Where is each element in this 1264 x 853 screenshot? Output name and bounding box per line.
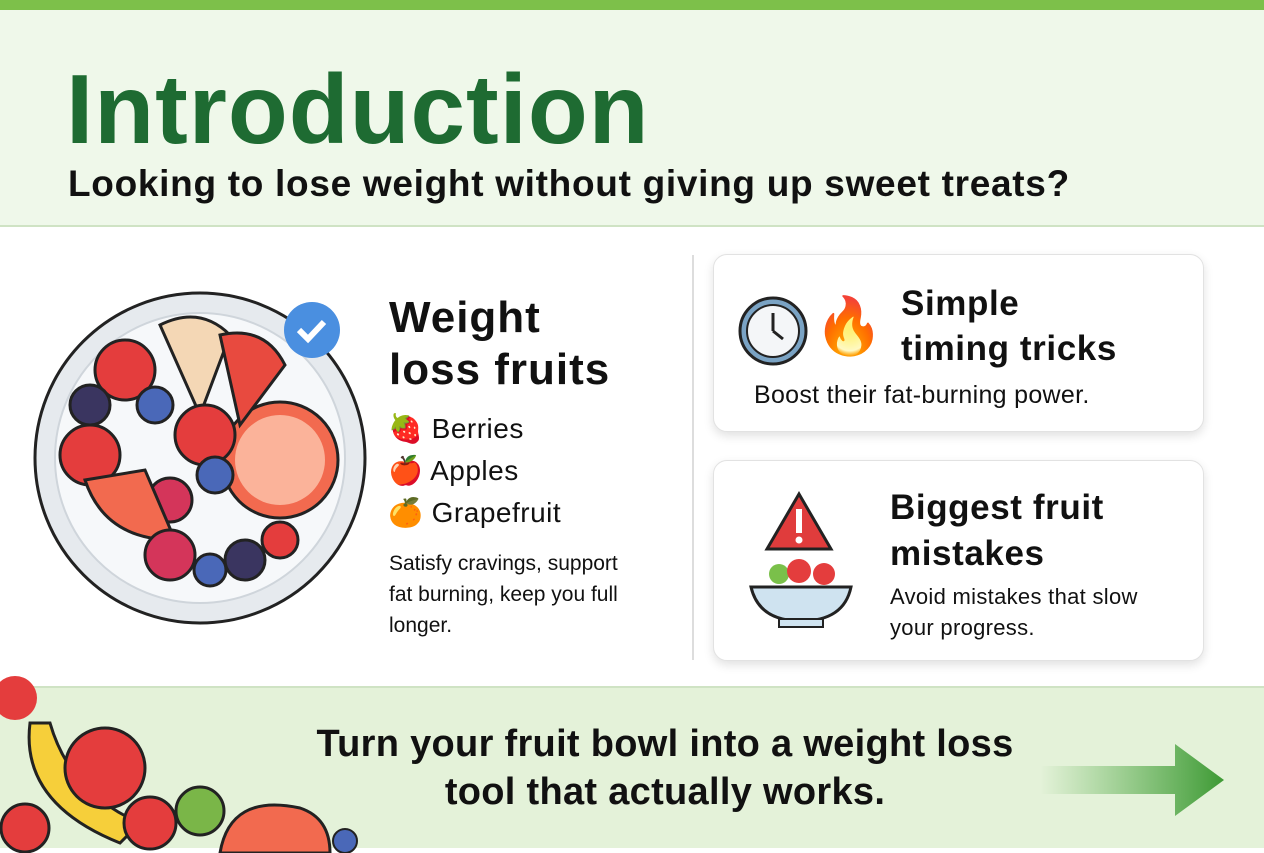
heading: weight loss fruits	[389, 293, 610, 394]
heading	[890, 488, 1104, 573]
heading: weight loss fruits: Weight	[389, 293, 541, 342]
icon: clock	[738, 296, 808, 366]
heading: Biggest fruit	[890, 488, 1104, 527]
card: mistakes	[713, 460, 1204, 661]
heading: mistakes	[890, 534, 1045, 573]
description	[389, 552, 618, 637]
fruit list: 🍓 Berries	[388, 413, 524, 444]
card: timing tricks	[713, 254, 1204, 432]
fruit pile illustration	[0, 676, 358, 853]
subtitle: Looking to lose weight without giving up sweet treats?	[68, 163, 1070, 204]
icon: warning bowl	[749, 491, 853, 628]
closing message	[316, 723, 1014, 813]
arrow	[1050, 744, 1224, 816]
header panel	[0, 10, 1264, 227]
footer band	[0, 686, 1264, 848]
text: Avoid mistakes that slow	[890, 584, 1138, 609]
heading: weight loss fruits: loss fruits	[389, 345, 610, 394]
fruit list: 🍊 Grapefruit	[388, 497, 561, 528]
fruit bowl illustration	[34, 292, 366, 624]
description: Satisfy cravings, support	[389, 552, 618, 575]
heading: Simple	[901, 284, 1019, 323]
closing message: tool that actually works.	[445, 771, 885, 813]
description: fat burning, keep you full	[389, 583, 618, 606]
heading: timing tricks	[901, 329, 1117, 368]
text: your progress.	[890, 615, 1035, 640]
fruit list	[388, 413, 561, 528]
title: Introduction	[66, 54, 650, 164]
fruit list: 🍎 Apples	[388, 455, 519, 486]
description: longer.	[389, 614, 452, 637]
closing message: Turn your fruit bowl into a weight loss	[316, 723, 1014, 765]
text	[890, 584, 1138, 640]
top bar	[0, 0, 1264, 10]
icon: fire: 🔥	[814, 294, 884, 357]
text: Boost their fat-burning power.	[754, 381, 1090, 409]
heading	[901, 284, 1117, 368]
